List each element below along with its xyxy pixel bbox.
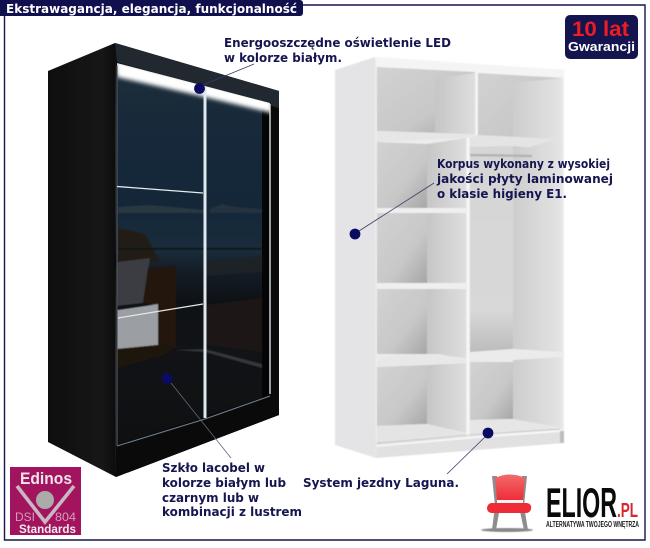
wardrobe front frame [115,43,279,477]
bottom rail [117,396,270,446]
callout: body [350,157,613,239]
Elior logo [481,474,639,532]
marker dot [194,83,205,94]
lower horizontal rails [118,304,203,318]
Edinos logo: Edinos [20,469,72,488]
marker dot [350,229,360,239]
callout: glass [162,373,302,519]
plinth [376,431,564,458]
guarantee badge: Gwarancji [568,39,635,54]
glass reflection [117,204,262,368]
left door rail [116,66,118,446]
label text: jakości płyty laminowanej [436,172,613,186]
callout: LED [194,36,451,94]
marker dot [162,373,172,384]
label text: kombinacji z lustrem [162,505,302,519]
right door rail [269,104,271,394]
label text: Energooszczędne oświetlenie LED [224,36,451,50]
bottom plinth [116,395,279,477]
hanging column [470,146,513,352]
centre vertical rail [204,87,206,418]
guarantee badge: 10 lat [572,18,629,41]
leader line [447,437,485,474]
label text: System jezdny Laguna. [303,476,459,490]
label text: kolorze białym lub [162,476,286,490]
white wardrobe [335,57,564,458]
leader line [359,183,434,231]
label text: w kolorze białym. [224,51,342,65]
dark right door edge [262,108,270,398]
Edinos logo: Standards [19,524,76,536]
white side panel [335,57,376,458]
lower right cell [470,362,513,420]
Edinos logo: 804 [55,510,76,524]
reflection: sofa [117,256,262,368]
upper right cell [478,73,562,150]
reflection: islands [118,204,262,262]
label text: o klasie higieny E1. [437,187,567,201]
label text: Korpus wykonany z wysokiej [437,157,610,171]
leader line [203,64,254,85]
Edinos logo [10,467,81,536]
upper left cell [377,67,475,134]
leader line [171,383,231,458]
left shelves [377,208,466,213]
Edinos logo: DSI [15,510,35,524]
LED light strip [115,60,272,113]
upper horizontal rails [117,186,203,193]
lower right shelf [470,349,557,362]
icon: red chair [481,474,533,532]
guarantee badge [565,15,638,59]
label text: Szkło lacobel w [162,461,265,475]
black wardrobe [48,43,279,477]
Elior logo: .PL [617,500,638,522]
hanging rail [470,155,532,156]
top frame band [115,43,279,108]
callout: rail system [303,428,493,490]
upper shelves [377,131,476,142]
wardrobe side panel [48,43,116,477]
title badge: Ekstrawagancja, elegancja, funkcjonalność [6,2,297,16]
central dividers [476,72,478,135]
white front body [375,57,564,458]
marker dot [483,428,493,438]
top board [375,57,564,78]
left column cells [377,142,427,208]
label text: czarnym lub w [162,491,259,505]
glass doors [117,63,270,445]
